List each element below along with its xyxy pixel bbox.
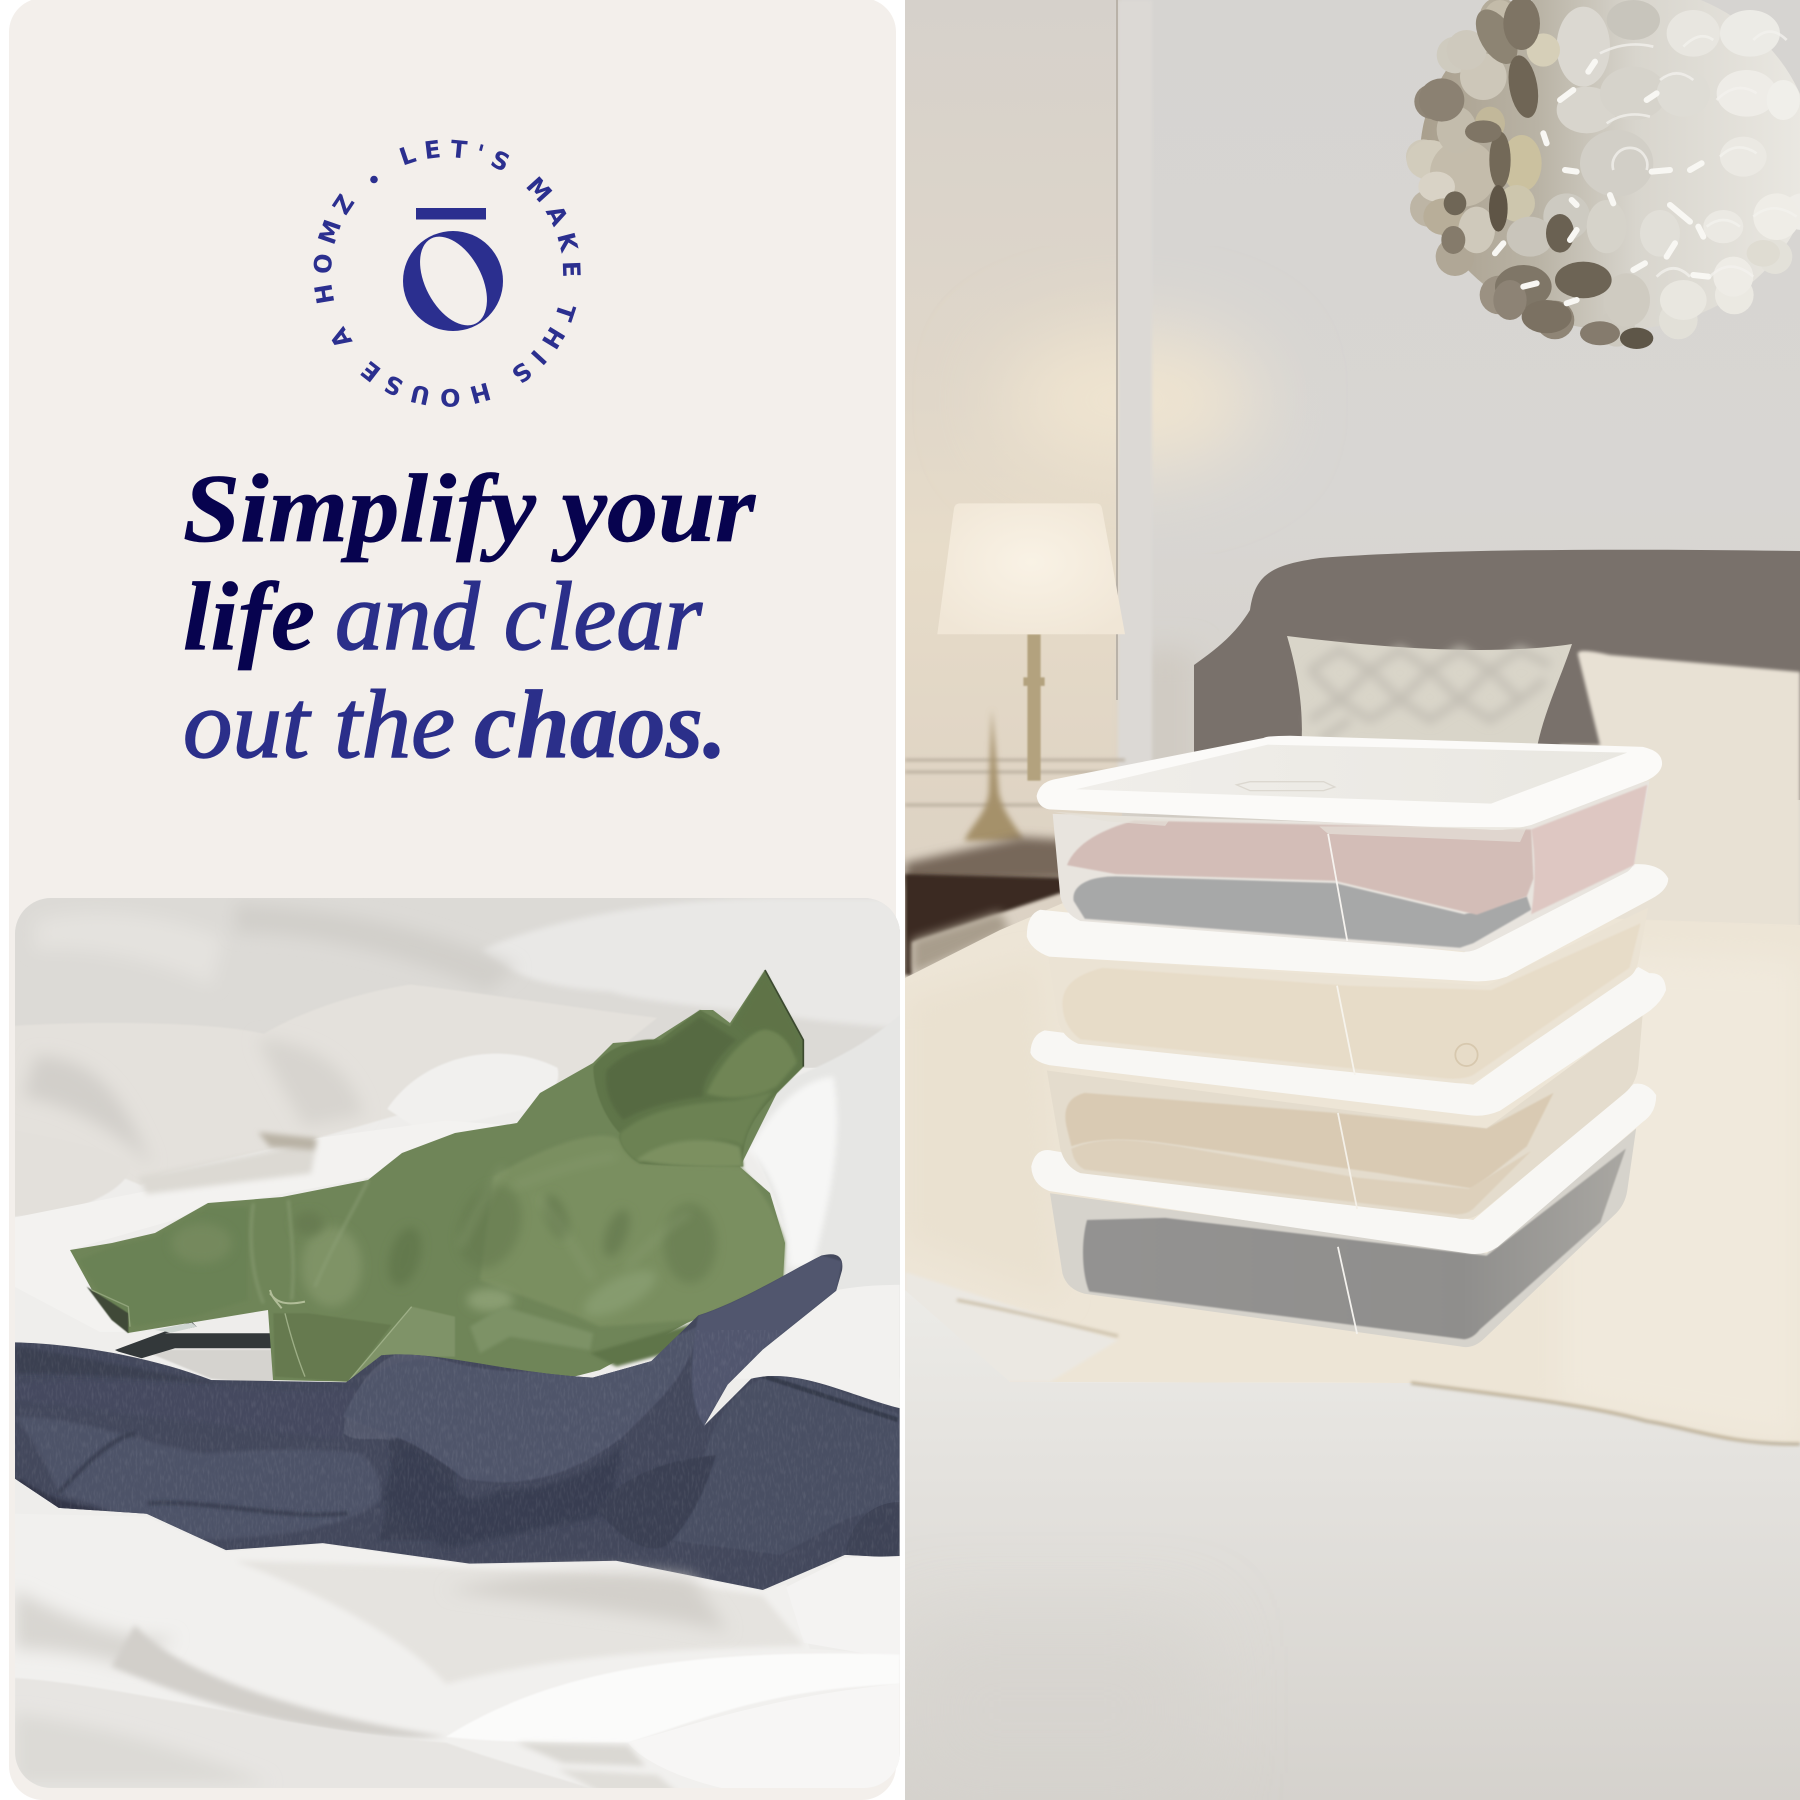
green shirt bbox=[70, 970, 803, 1382]
flower tan petals bbox=[1407, 0, 1560, 257]
flower petal outlines bbox=[1600, 32, 1797, 277]
lamp foot bbox=[964, 709, 1023, 841]
panel: cream left card bbox=[9, 0, 896, 1800]
heather texture bbox=[15, 1330, 900, 1590]
flower metallic highlights bbox=[1495, 62, 1708, 303]
flower dark petals bbox=[1419, 0, 1653, 349]
stack of four clear storage boxes bbox=[1027, 736, 1668, 1347]
upholstered headboard bbox=[1194, 550, 1800, 800]
rumpled white bedding bbox=[15, 898, 900, 1756]
wall molding strip bbox=[905, 0, 1152, 805]
heading: Simplify your bbox=[183, 455, 756, 563]
cream bed pillow bbox=[1560, 651, 1800, 940]
shirt collar folds bbox=[593, 970, 803, 1167]
lamp stem bbox=[1023, 634, 1045, 781]
flower scalloped rim bbox=[1406, 0, 1800, 347]
box 2 with cream fabric bbox=[1027, 864, 1668, 1083]
table lamp bbox=[937, 503, 1125, 841]
logo letter o bbox=[403, 225, 503, 337]
cream blanket on bed bbox=[905, 900, 1800, 1443]
box 4 with grey fabric bbox=[1031, 1084, 1656, 1347]
patterned throw pillow bbox=[1287, 636, 1572, 744]
white sheet foreground bbox=[905, 1290, 1800, 1800]
photo: tidy bedroom with stacked storage boxes bbox=[905, 0, 1800, 1800]
photo: messy bed with clothes bbox=[0, 880, 939, 1800]
nightstand bbox=[905, 837, 1070, 975]
pants folds right bbox=[343, 1256, 900, 1558]
heading: and clear bbox=[335, 563, 703, 671]
heading: chaos. bbox=[474, 671, 727, 779]
heading: out the bbox=[183, 671, 455, 779]
circular slogan: LET'S MAKE THIS HOUSE A HOMZ bbox=[314, 140, 581, 407]
lamp shade bbox=[937, 503, 1125, 634]
heading: life bbox=[183, 563, 315, 671]
logo separator dot bbox=[370, 176, 378, 183]
logo badge bbox=[314, 140, 581, 407]
box 1 with pink and grey fabric bbox=[1037, 736, 1662, 952]
pants folds left bbox=[15, 1347, 455, 1540]
shirt body folds right bbox=[447, 970, 803, 1367]
bedroom wall bbox=[905, 0, 1800, 1000]
heading bbox=[183, 455, 756, 779]
flower base disc bbox=[1420, 0, 1800, 330]
shirt sleeve and hem bbox=[78, 1180, 455, 1382]
duvet folds foreground bbox=[15, 1556, 900, 1788]
flower pale petals bbox=[1543, 0, 1800, 327]
box 3 with tan fabric bbox=[1030, 967, 1666, 1219]
hanger bbox=[115, 1322, 273, 1358]
logo macron bar bbox=[416, 208, 486, 220]
navy pants bbox=[15, 1254, 900, 1590]
decorative metal flower wall art bbox=[1406, 0, 1800, 349]
